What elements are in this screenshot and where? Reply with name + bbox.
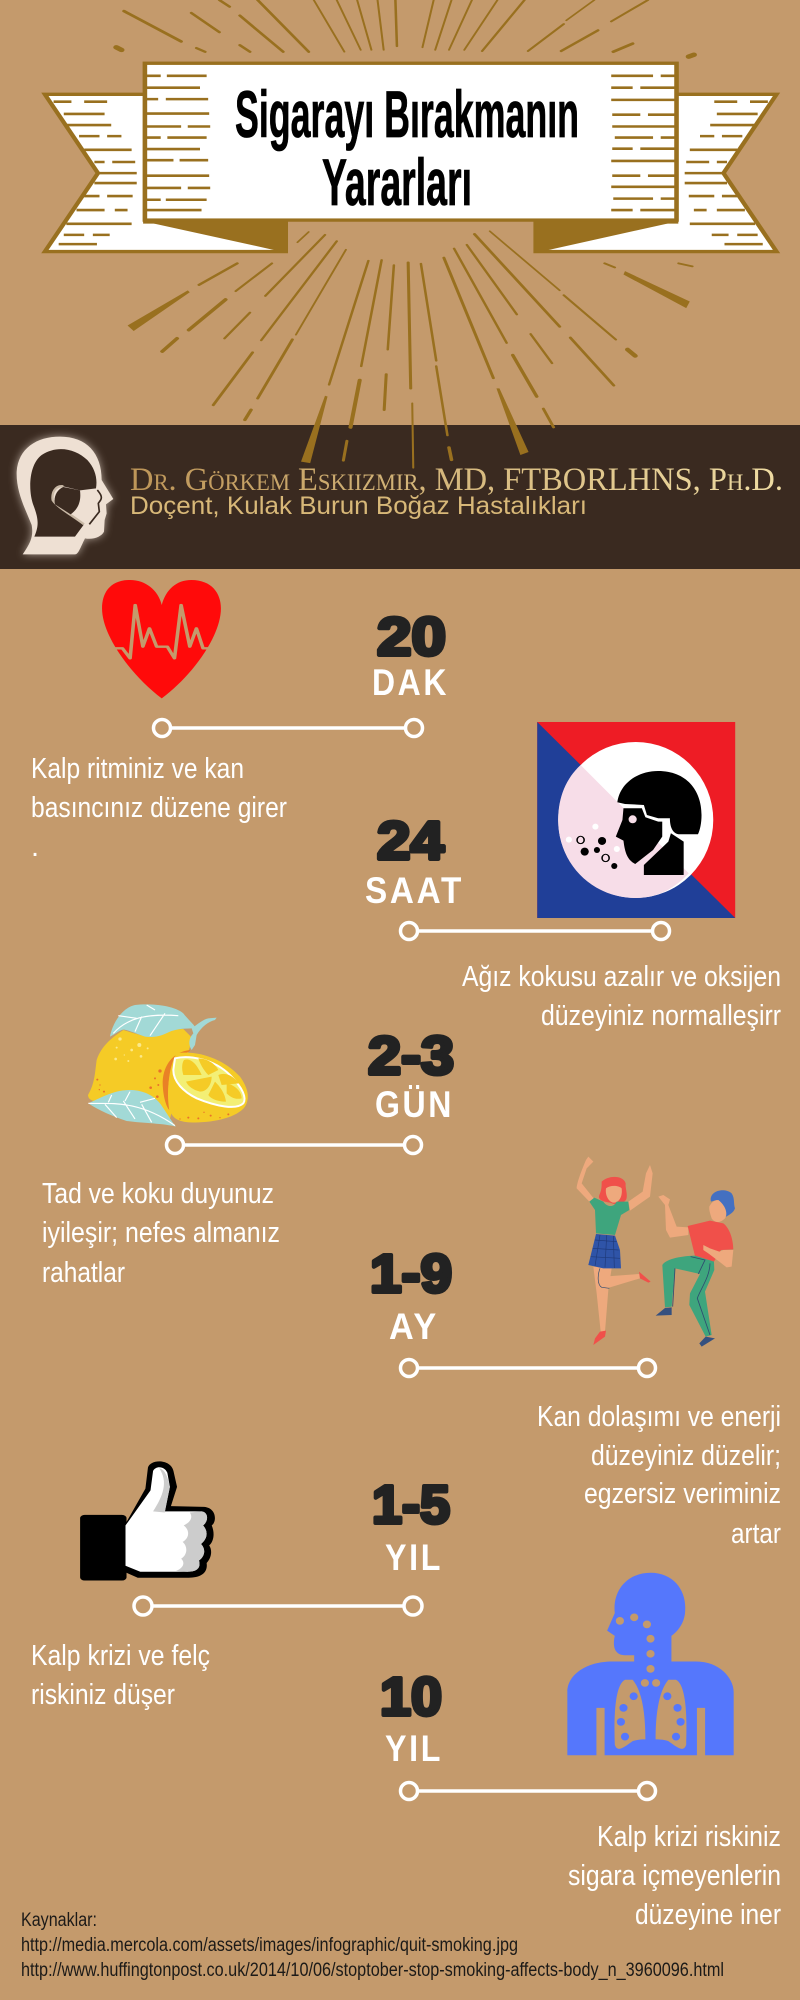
banner centre panel — [145, 63, 677, 220]
right ribbon tail — [536, 94, 777, 252]
text: taste benefit: rahatlar — [42, 1257, 125, 1289]
text: taste benefit: Tad ve koku duyunuz — [42, 1178, 274, 1210]
text: taste benefit — [42, 1178, 280, 1289]
title banner — [45, 63, 777, 253]
title: Yararları — [322, 145, 472, 219]
time: 24 SAAT: SAAT — [365, 870, 464, 911]
text: taste benefit: iyileşir; nefes almanız — [42, 1217, 280, 1249]
ribbon folds — [143, 221, 678, 253]
connector 4 — [400, 1360, 656, 1376]
text: heart attack benefit: riskiniz düşer — [31, 1679, 175, 1711]
icon: dancers — [577, 1157, 735, 1347]
time: 10 YIL — [380, 1667, 443, 1769]
time: 10 YIL: YIL — [385, 1728, 443, 1769]
time: 1-5 YIL — [372, 1475, 450, 1578]
time: 20 DAK — [372, 607, 449, 703]
title — [235, 77, 579, 219]
icon: head with mask — [17, 437, 113, 554]
man — [656, 1190, 735, 1347]
sources: http://media.mercola.com/assets/images/infographic/quit-smoking.jpg — [21, 1935, 518, 1956]
connector 5 — [134, 1597, 422, 1615]
text: long-term benefit — [568, 1821, 781, 1931]
connector 1 — [154, 720, 422, 736]
icon: lemon — [88, 1004, 248, 1127]
text: heart benefit: basıncınız düzene girer — [31, 792, 287, 824]
text: heart benefit: . — [31, 831, 39, 863]
text: breath benefit — [462, 961, 781, 1032]
time: 1-9 AY: 1-9 — [370, 1244, 452, 1304]
time: 2-3 GÜN — [368, 1026, 454, 1125]
icon: heart — [102, 580, 221, 698]
text: heart benefit: Kalp ritminiz ve kan — [31, 753, 244, 785]
sources — [21, 1910, 724, 1981]
time: 2-3 GÜN: GÜN — [375, 1084, 454, 1125]
connector 3 — [166, 1136, 422, 1154]
doctor band background — [0, 425, 800, 569]
icon: thumbs up — [80, 1461, 215, 1580]
connector 6 — [400, 1782, 656, 1800]
time: 1-5 YIL: YIL — [385, 1537, 443, 1578]
woman — [577, 1157, 653, 1345]
sunburst rays — [116, 0, 694, 468]
banner wood stripes — [147, 76, 674, 210]
icon: body with lungs — [567, 1573, 734, 1755]
icon: bad breath head — [537, 722, 735, 918]
time: 1-5 YIL: 1-5 — [372, 1475, 450, 1535]
time: 24 SAAT — [365, 811, 464, 911]
time: 10 YIL: 10 — [380, 1667, 442, 1727]
time: 24 SAAT: 24 — [377, 811, 444, 871]
text: heart benefit — [31, 753, 287, 863]
time: 2-3 GÜN: 2-3 — [368, 1026, 454, 1086]
doctor title: Doçent, Kulak Burun Boğaz Hastalıkları — [130, 492, 587, 520]
sources: Kaynaklar: — [21, 1910, 97, 1931]
text: circulation benefit — [537, 1401, 781, 1550]
text: heart attack benefit — [31, 1640, 210, 1711]
time: 20 DAK: DAK — [372, 662, 449, 703]
text: heart attack benefit: Kalp krizi ve felç — [31, 1640, 210, 1672]
time: 1-9 AY — [370, 1244, 452, 1347]
text: circulation benefit: artar — [731, 1518, 781, 1550]
left ribbon tail — [45, 94, 286, 252]
connector 2 — [400, 922, 670, 940]
time: 1-9 AY: AY — [389, 1306, 439, 1347]
time: 20 DAK: 20 — [377, 607, 446, 667]
doctor name: Dr. Görkem Eskiizmir, MD, FTBORLHNS, Ph.D. — [130, 462, 783, 498]
